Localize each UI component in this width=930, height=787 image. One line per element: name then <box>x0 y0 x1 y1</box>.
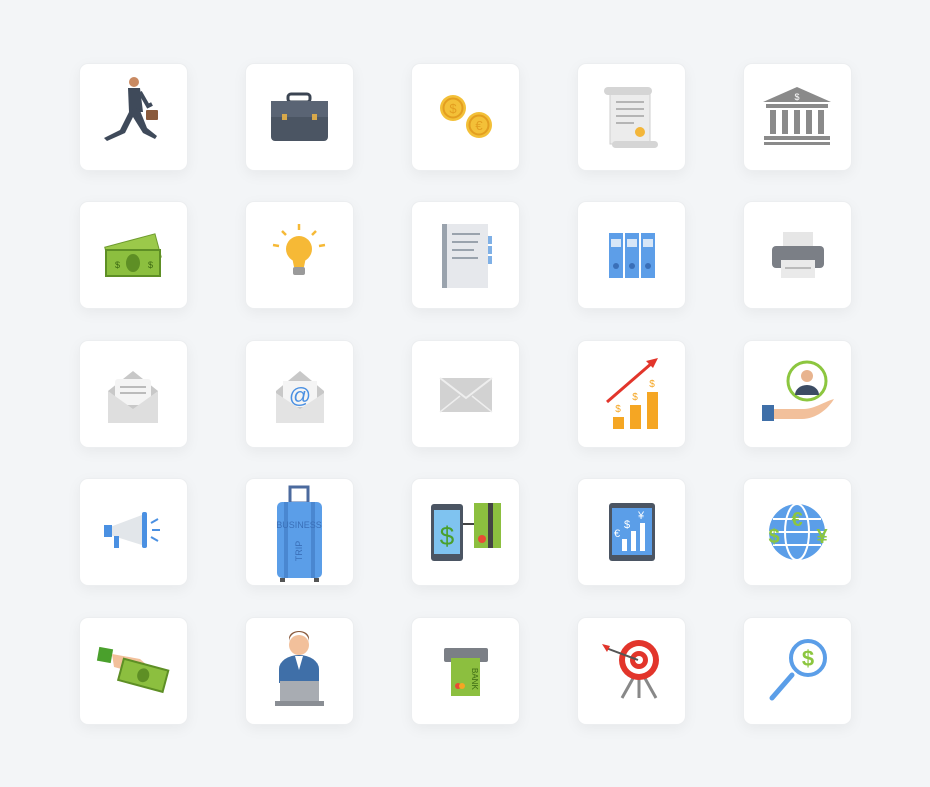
card: growth chart: $ <box>649 379 655 390</box>
card: bank: $ <box>794 92 800 102</box>
card: briefcase <box>245 63 354 171</box>
card: ATM card <box>411 617 520 725</box>
card: tablet currency chart <box>577 478 686 586</box>
card: banknotes: $ <box>148 260 153 270</box>
card: open envelope letter <box>79 340 188 448</box>
card: magnifier dollar <box>743 617 852 725</box>
card: walking businessman <box>79 63 188 171</box>
card: tablet currency chart: $ <box>624 519 630 531</box>
card: globe currencies <box>743 478 852 586</box>
card: tablet currency chart: € <box>614 528 620 540</box>
card: printer <box>743 201 852 309</box>
card: coins: $ <box>449 101 457 116</box>
card: hand holding person <box>743 340 852 448</box>
card: certificate scroll <box>577 63 686 171</box>
card: email at: @ <box>289 383 311 408</box>
card: suitcase <box>245 478 354 586</box>
card: phone payment: $ <box>440 521 455 551</box>
card: coins <box>411 63 520 171</box>
card: coins: € <box>475 118 483 133</box>
card: suitcase: TRIP <box>294 541 304 561</box>
card: ATM card: BANK <box>470 668 479 690</box>
card: growth chart: $ <box>615 404 621 415</box>
card: bank <box>743 63 852 171</box>
card: banknotes <box>79 201 188 309</box>
card: growth chart: $ <box>632 392 638 403</box>
card: globe currencies: ¥ <box>816 526 828 548</box>
card: phone payment <box>411 478 520 586</box>
card: target with dart <box>577 617 686 725</box>
card: hand giving money <box>79 617 188 725</box>
card: email at <box>245 340 354 448</box>
card: megaphone <box>79 478 188 586</box>
card: magnifier dollar: $ <box>802 646 814 671</box>
card: growth chart <box>577 340 686 448</box>
card: notebook <box>411 201 520 309</box>
card: light bulb <box>245 201 354 309</box>
card: tablet currency chart: ¥ <box>637 510 645 522</box>
card: binders <box>577 201 686 309</box>
card: closed envelope <box>411 340 520 448</box>
card: man at laptop <box>245 617 354 725</box>
card: suitcase: BUSINESS <box>276 520 322 530</box>
card: banknotes: $ <box>115 260 120 270</box>
card: globe currencies: € <box>791 509 803 531</box>
card: globe currencies: $ <box>768 526 780 548</box>
